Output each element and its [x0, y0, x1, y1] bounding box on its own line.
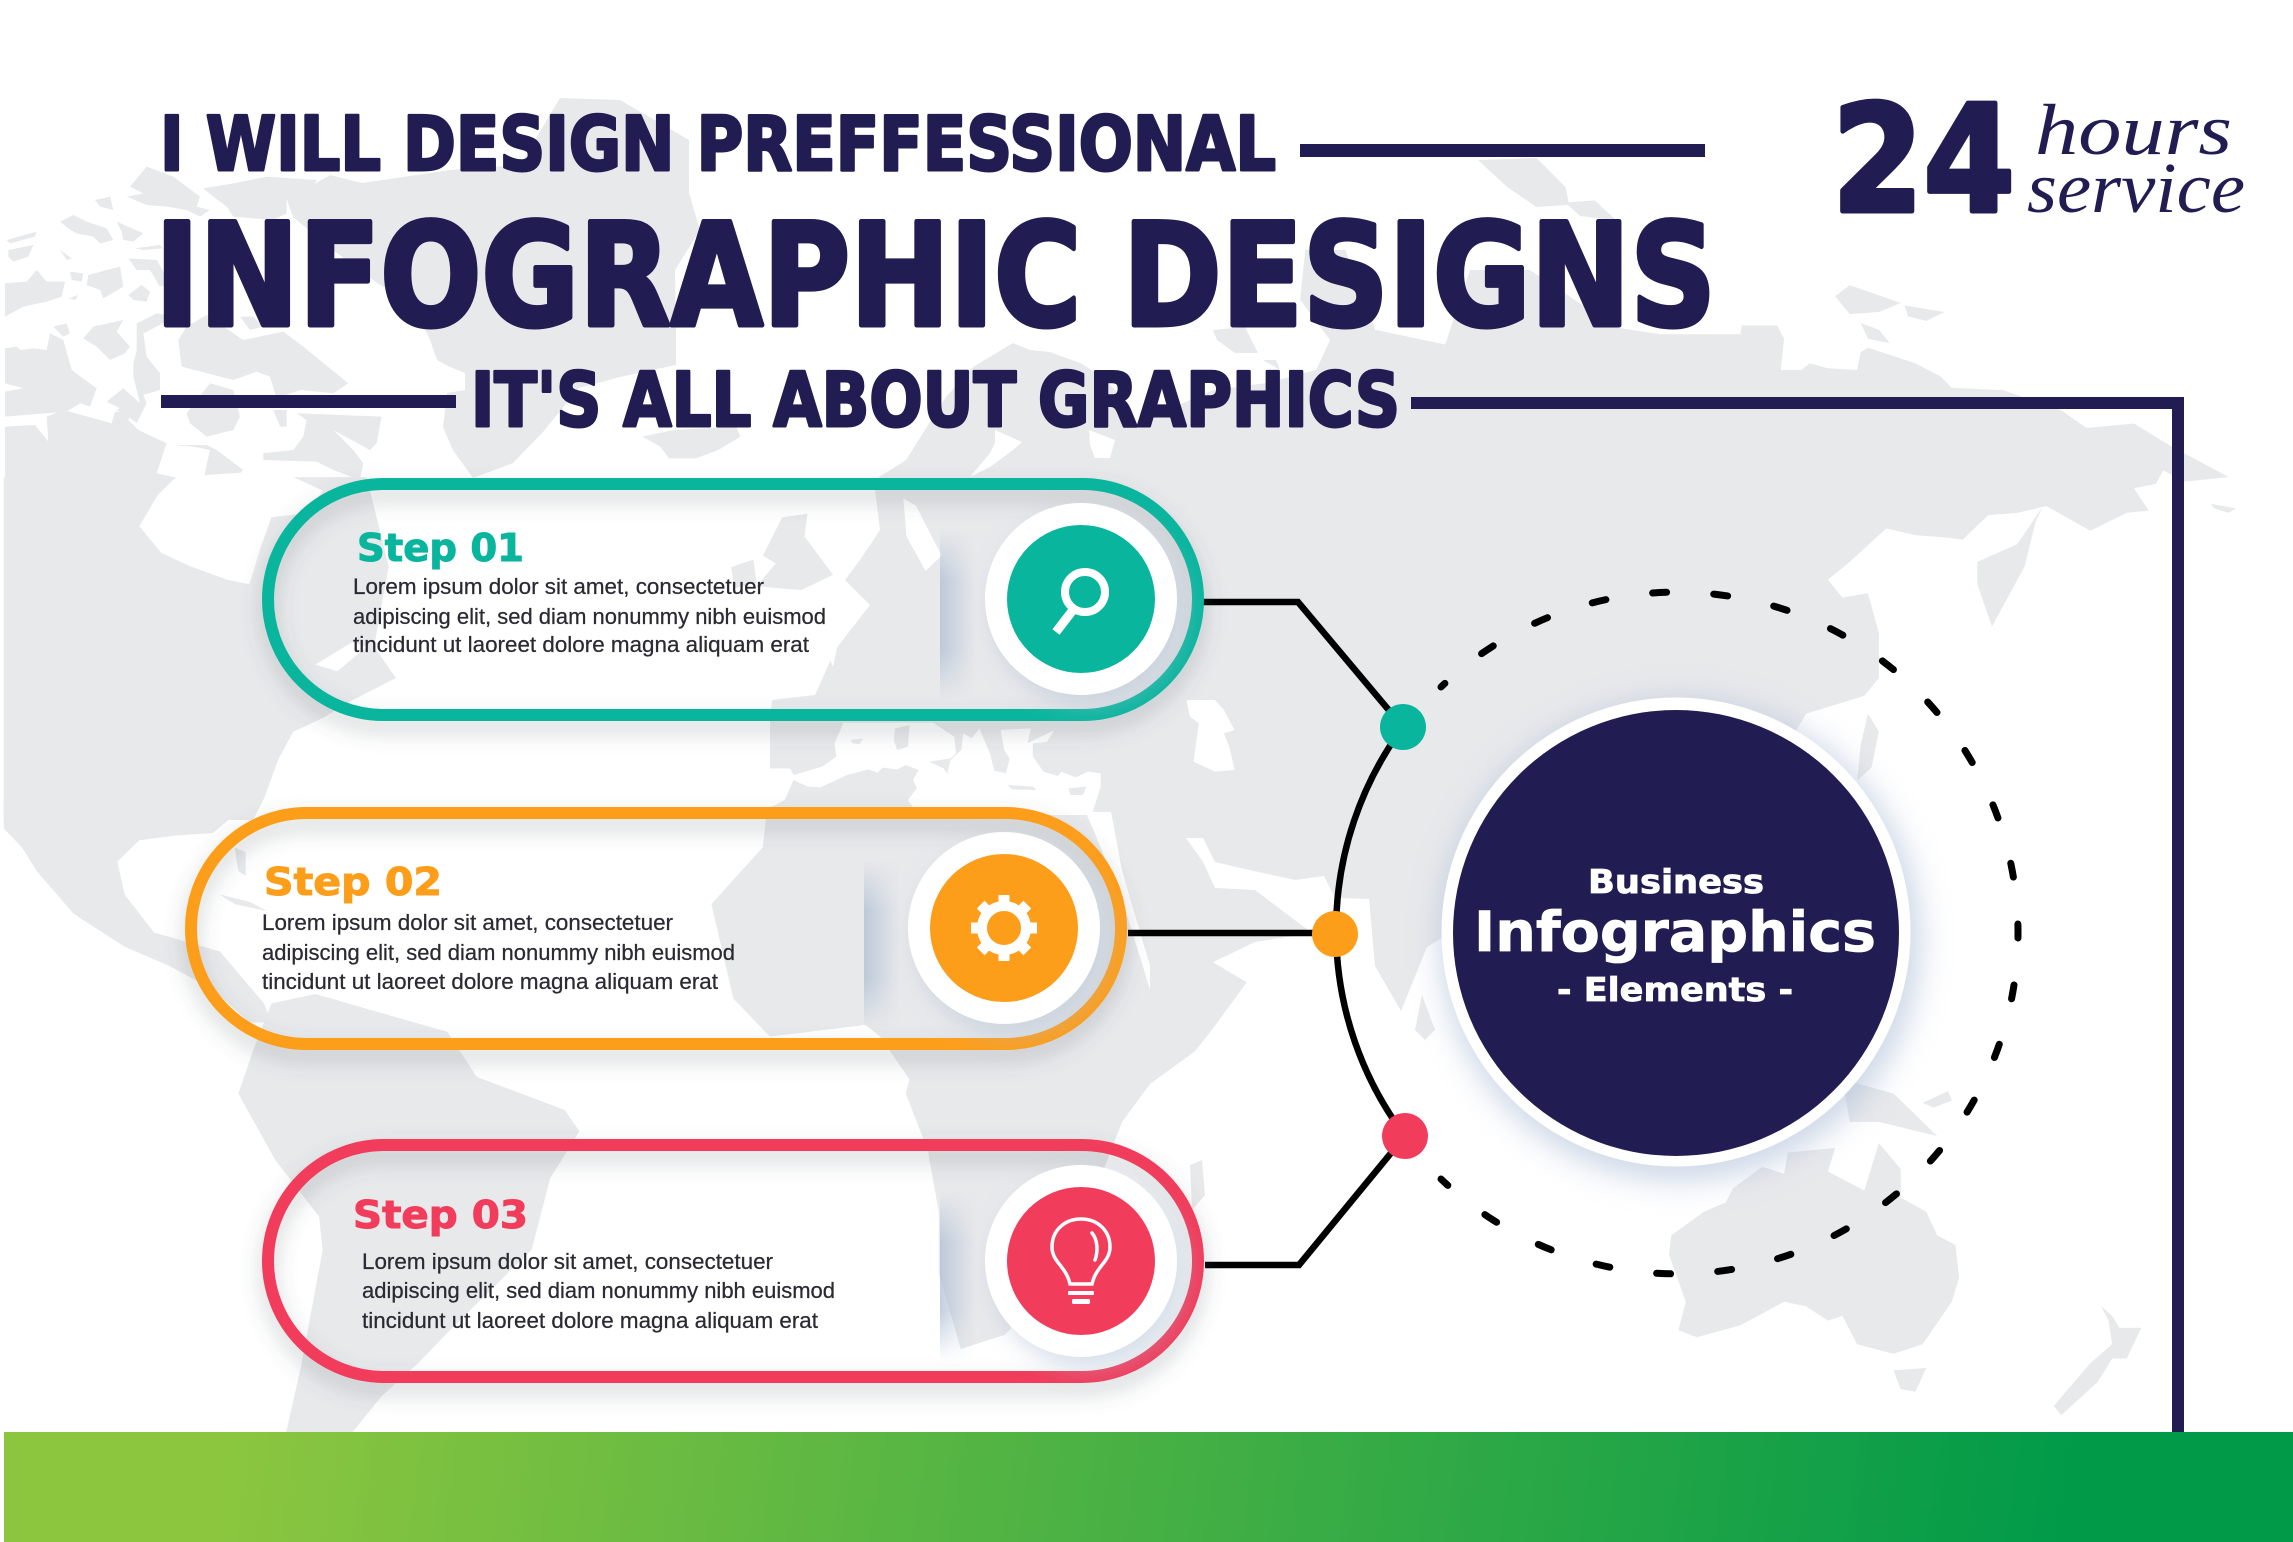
node dots [1312, 704, 1428, 1159]
step 03 panel [268, 1145, 1198, 1387]
central label: - Elements - [1557, 970, 1793, 1009]
step 01 text: adipiscing elit, sed diam nonummy nibh euismod [353, 604, 826, 629]
badge: 24 hours service: 24 [1832, 74, 2015, 246]
badge: 24 hours service: service [2027, 148, 2245, 228]
step 03 text [362, 1249, 835, 1333]
connector lines [1128, 602, 1405, 1265]
central label: Business [1588, 862, 1764, 901]
badge: 24 hours service: hours [2035, 90, 2232, 170]
step 01 heading: Step 01 [357, 526, 524, 570]
step 01 panel [268, 484, 1198, 725]
step 02 text [262, 910, 735, 994]
step 01 text: tincidunt ut laoreet dolore magna aliquam erat [353, 632, 809, 657]
dashed orbit [1441, 592, 2018, 1274]
step 02 text: Lorem ipsum dolor sit amet, consectetuer [262, 910, 673, 935]
footer green bar [4, 1432, 2293, 1542]
central label [1474, 862, 1876, 1009]
icon: light bulb [1052, 1219, 1110, 1304]
step 02 text: adipiscing elit, sed diam nonummy nibh euismod [262, 940, 735, 965]
step 02 panel [191, 813, 1121, 1054]
icon: magnifier [1056, 572, 1105, 632]
step 03 text: Lorem ipsum dolor sit amet, consectetuer [362, 1249, 773, 1274]
step 03 text: tincidunt ut laoreet dolore magna aliquam erat [362, 1308, 818, 1333]
step 01 text: Lorem ipsum dolor sit amet, consectetuer [353, 574, 764, 599]
central label: Infographics [1474, 900, 1876, 964]
icon: gear [971, 895, 1037, 961]
step 03 heading: Step 03 [353, 1193, 528, 1237]
rule left of subtitle [161, 395, 456, 408]
central circle [1440, 698, 1920, 1180]
rule beside first heading [1300, 144, 1705, 157]
main title: INFOGRAPHIC DESIGNS [155, 194, 1716, 359]
heading line: I will design: I WILL DESIGN PREFFESSIONAL [160, 100, 1276, 188]
badge: 24 hours service [1832, 74, 2245, 246]
step 02 text: tincidunt ut laoreet dolore magna aliquam erat [262, 969, 718, 994]
step 02 heading: Step 02 [264, 860, 442, 904]
step 03 text: adipiscing elit, sed diam nonummy nibh euismod [362, 1278, 835, 1303]
frame line: right vertical and top rule [1411, 403, 2178, 1432]
subtitle: IT'S ALL ABOUT GRAPHICS [471, 356, 1400, 444]
step 01 text [353, 574, 826, 657]
